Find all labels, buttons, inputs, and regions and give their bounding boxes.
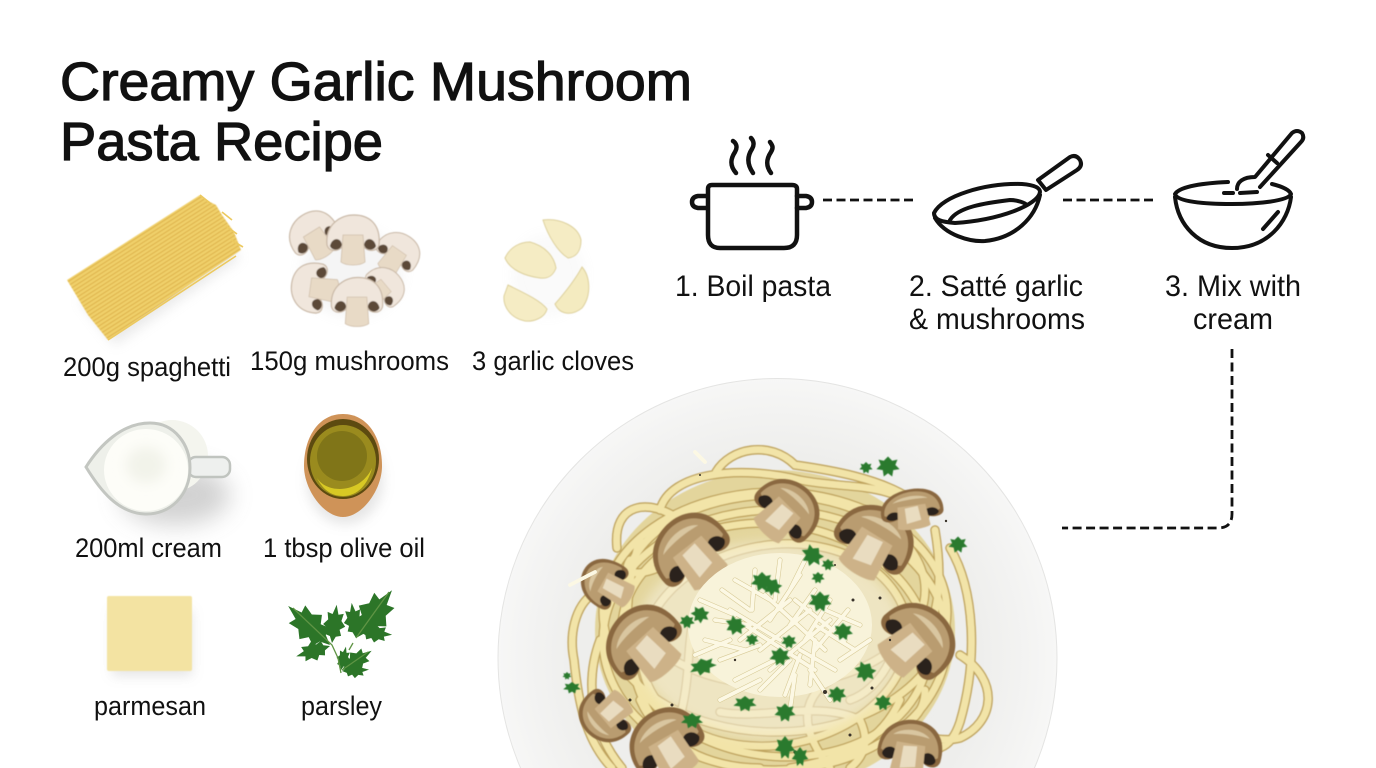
arrow: dashed connector 1 (823, 199, 916, 201)
ingredient: parmesan block (107, 596, 192, 676)
icon: frying pan (934, 156, 1081, 241)
creamy sauce (635, 542, 905, 738)
ingredient: garlic cloves (504, 220, 589, 321)
finished dish: pasta plate (498, 378, 1057, 768)
ingredient: spaghetti (67, 195, 243, 345)
ingredient: mushrooms (280, 203, 427, 326)
parsley garnish (563, 456, 967, 766)
pepper specks (628, 474, 947, 754)
ingredient: cream jug (86, 420, 230, 525)
label: step 3: 3. Mix with (1165, 270, 1301, 303)
panel: steps (675, 131, 1303, 528)
label: step 3: cream (1193, 303, 1273, 336)
title: Creamy Garlic Mushroom (60, 52, 692, 112)
label: step 1: 1. Boil pasta (675, 270, 831, 303)
icon: steaming pot (692, 138, 812, 248)
label: 200ml cream: 200ml cream (75, 533, 222, 563)
grated parmesan (570, 452, 872, 710)
label: step 2: & mushrooms (909, 303, 1085, 336)
title: Pasta Recipe (60, 112, 383, 172)
label: parmesan: parmesan (94, 691, 206, 721)
label: step 3 (1165, 270, 1301, 336)
label: parsley: parsley (301, 691, 383, 721)
label: 1 tbsp olive oil: 1 tbsp olive oil (263, 533, 425, 563)
plate (498, 378, 1057, 768)
label: 200g spaghetti: 200g spaghetti (63, 352, 231, 382)
panel: ingredients (63, 195, 634, 721)
pasta strands (572, 450, 988, 768)
title (60, 52, 692, 172)
label: 3 garlic cloves: 3 garlic cloves (472, 346, 634, 376)
arrow: dashed connector 2 (1063, 199, 1156, 201)
ingredient: olive oil bowl (304, 414, 383, 524)
label: step 2 (909, 270, 1085, 336)
icon: mixing bowl with spoon (1175, 131, 1303, 248)
label: step 2: 2. Satté garlic (909, 270, 1083, 303)
mushrooms (568, 465, 970, 768)
arrow: dashed connector to plate (1062, 349, 1232, 528)
label: 150g mushrooms: 150g mushrooms (250, 346, 449, 376)
ingredient: parsley (277, 580, 406, 679)
